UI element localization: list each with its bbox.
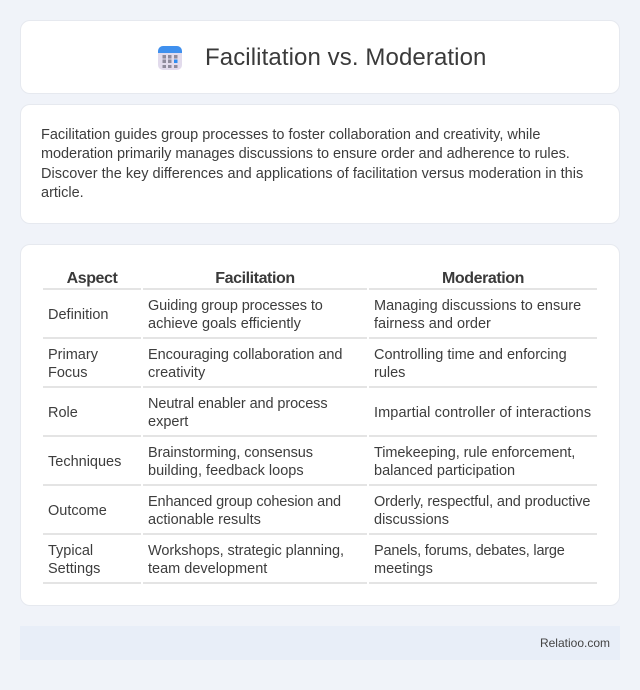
row: definition bbox=[48, 298, 581, 332]
row: role: Neutral enabler and process bbox=[148, 396, 327, 412]
row: primary focus: Encouraging collaboration and bbox=[148, 347, 342, 363]
row: primary focus: rules bbox=[374, 365, 405, 381]
panel: comparison table card bbox=[20, 244, 620, 606]
row: primary focus: creativity bbox=[148, 365, 205, 381]
panel: intro text card bbox=[20, 104, 620, 224]
row: primary focus: Primary bbox=[48, 347, 98, 363]
footer bar bbox=[20, 626, 620, 660]
row: typical settings: Typical bbox=[48, 543, 93, 559]
row: role bbox=[48, 396, 591, 430]
row: typical settings: Panels, forums, debates, large bbox=[374, 543, 565, 559]
row: typical settings bbox=[48, 543, 565, 577]
row: typical settings: team development bbox=[148, 561, 267, 577]
row: role: expert bbox=[148, 414, 188, 430]
row: outcome: actionable results bbox=[148, 512, 261, 528]
panel: title card bbox=[20, 20, 620, 94]
row: primary focus bbox=[48, 347, 567, 381]
intro text: moderation primarily manages discussions to ensure order and adherence to rules. bbox=[41, 146, 570, 162]
intro text: Facilitation guides group processes to foster collaboration and creativity, while bbox=[41, 127, 540, 143]
title: Facilitation vs. Moderation bbox=[205, 44, 486, 71]
table header bbox=[67, 270, 524, 287]
table header: Moderation bbox=[442, 270, 524, 287]
row: typical settings: meetings bbox=[374, 561, 433, 577]
row: techniques: building, feedback loops bbox=[148, 463, 304, 479]
row: outcome: Orderly, respectful, and productive bbox=[374, 494, 590, 510]
row: techniques: Timekeeping, rule enforcement, bbox=[374, 445, 575, 461]
row: techniques: Techniques bbox=[48, 454, 121, 470]
row: definition: Managing discussions to ensure bbox=[374, 298, 581, 314]
row: outcome bbox=[48, 494, 590, 528]
intro text bbox=[41, 127, 583, 201]
row: primary focus: Controlling time and enforcing bbox=[374, 347, 567, 363]
footer brand: Relatioo.com bbox=[540, 636, 610, 650]
row: typical settings: Workshops, strategic planning, bbox=[148, 543, 344, 559]
row: techniques: Brainstorming, consensus bbox=[148, 445, 313, 461]
row: definition: Definition bbox=[48, 307, 108, 323]
comparison table bbox=[43, 270, 597, 584]
row: role: Role bbox=[48, 405, 78, 421]
table header: Aspect bbox=[67, 270, 117, 287]
row: primary focus: Focus bbox=[48, 365, 88, 381]
table header: Facilitation bbox=[215, 270, 295, 287]
row: definition: achieve goals efficiently bbox=[148, 316, 301, 332]
row: outcome: discussions bbox=[374, 512, 449, 528]
row: role: Impartial controller of interactions bbox=[374, 405, 591, 421]
intro text: Discover the key differences and applications of facilitation versus moderation in this bbox=[41, 166, 583, 182]
row: techniques bbox=[48, 445, 575, 479]
icon: calendar bbox=[158, 46, 182, 70]
row: outcome: Enhanced group cohesion and bbox=[148, 494, 341, 510]
row: techniques: balanced participation bbox=[374, 463, 515, 479]
intro text: article. bbox=[41, 185, 84, 201]
row: outcome: Outcome bbox=[48, 503, 107, 519]
row: definition: fairness and order bbox=[374, 316, 491, 332]
row: typical settings: Settings bbox=[48, 561, 100, 577]
row: definition: Guiding group processes to bbox=[148, 298, 323, 314]
